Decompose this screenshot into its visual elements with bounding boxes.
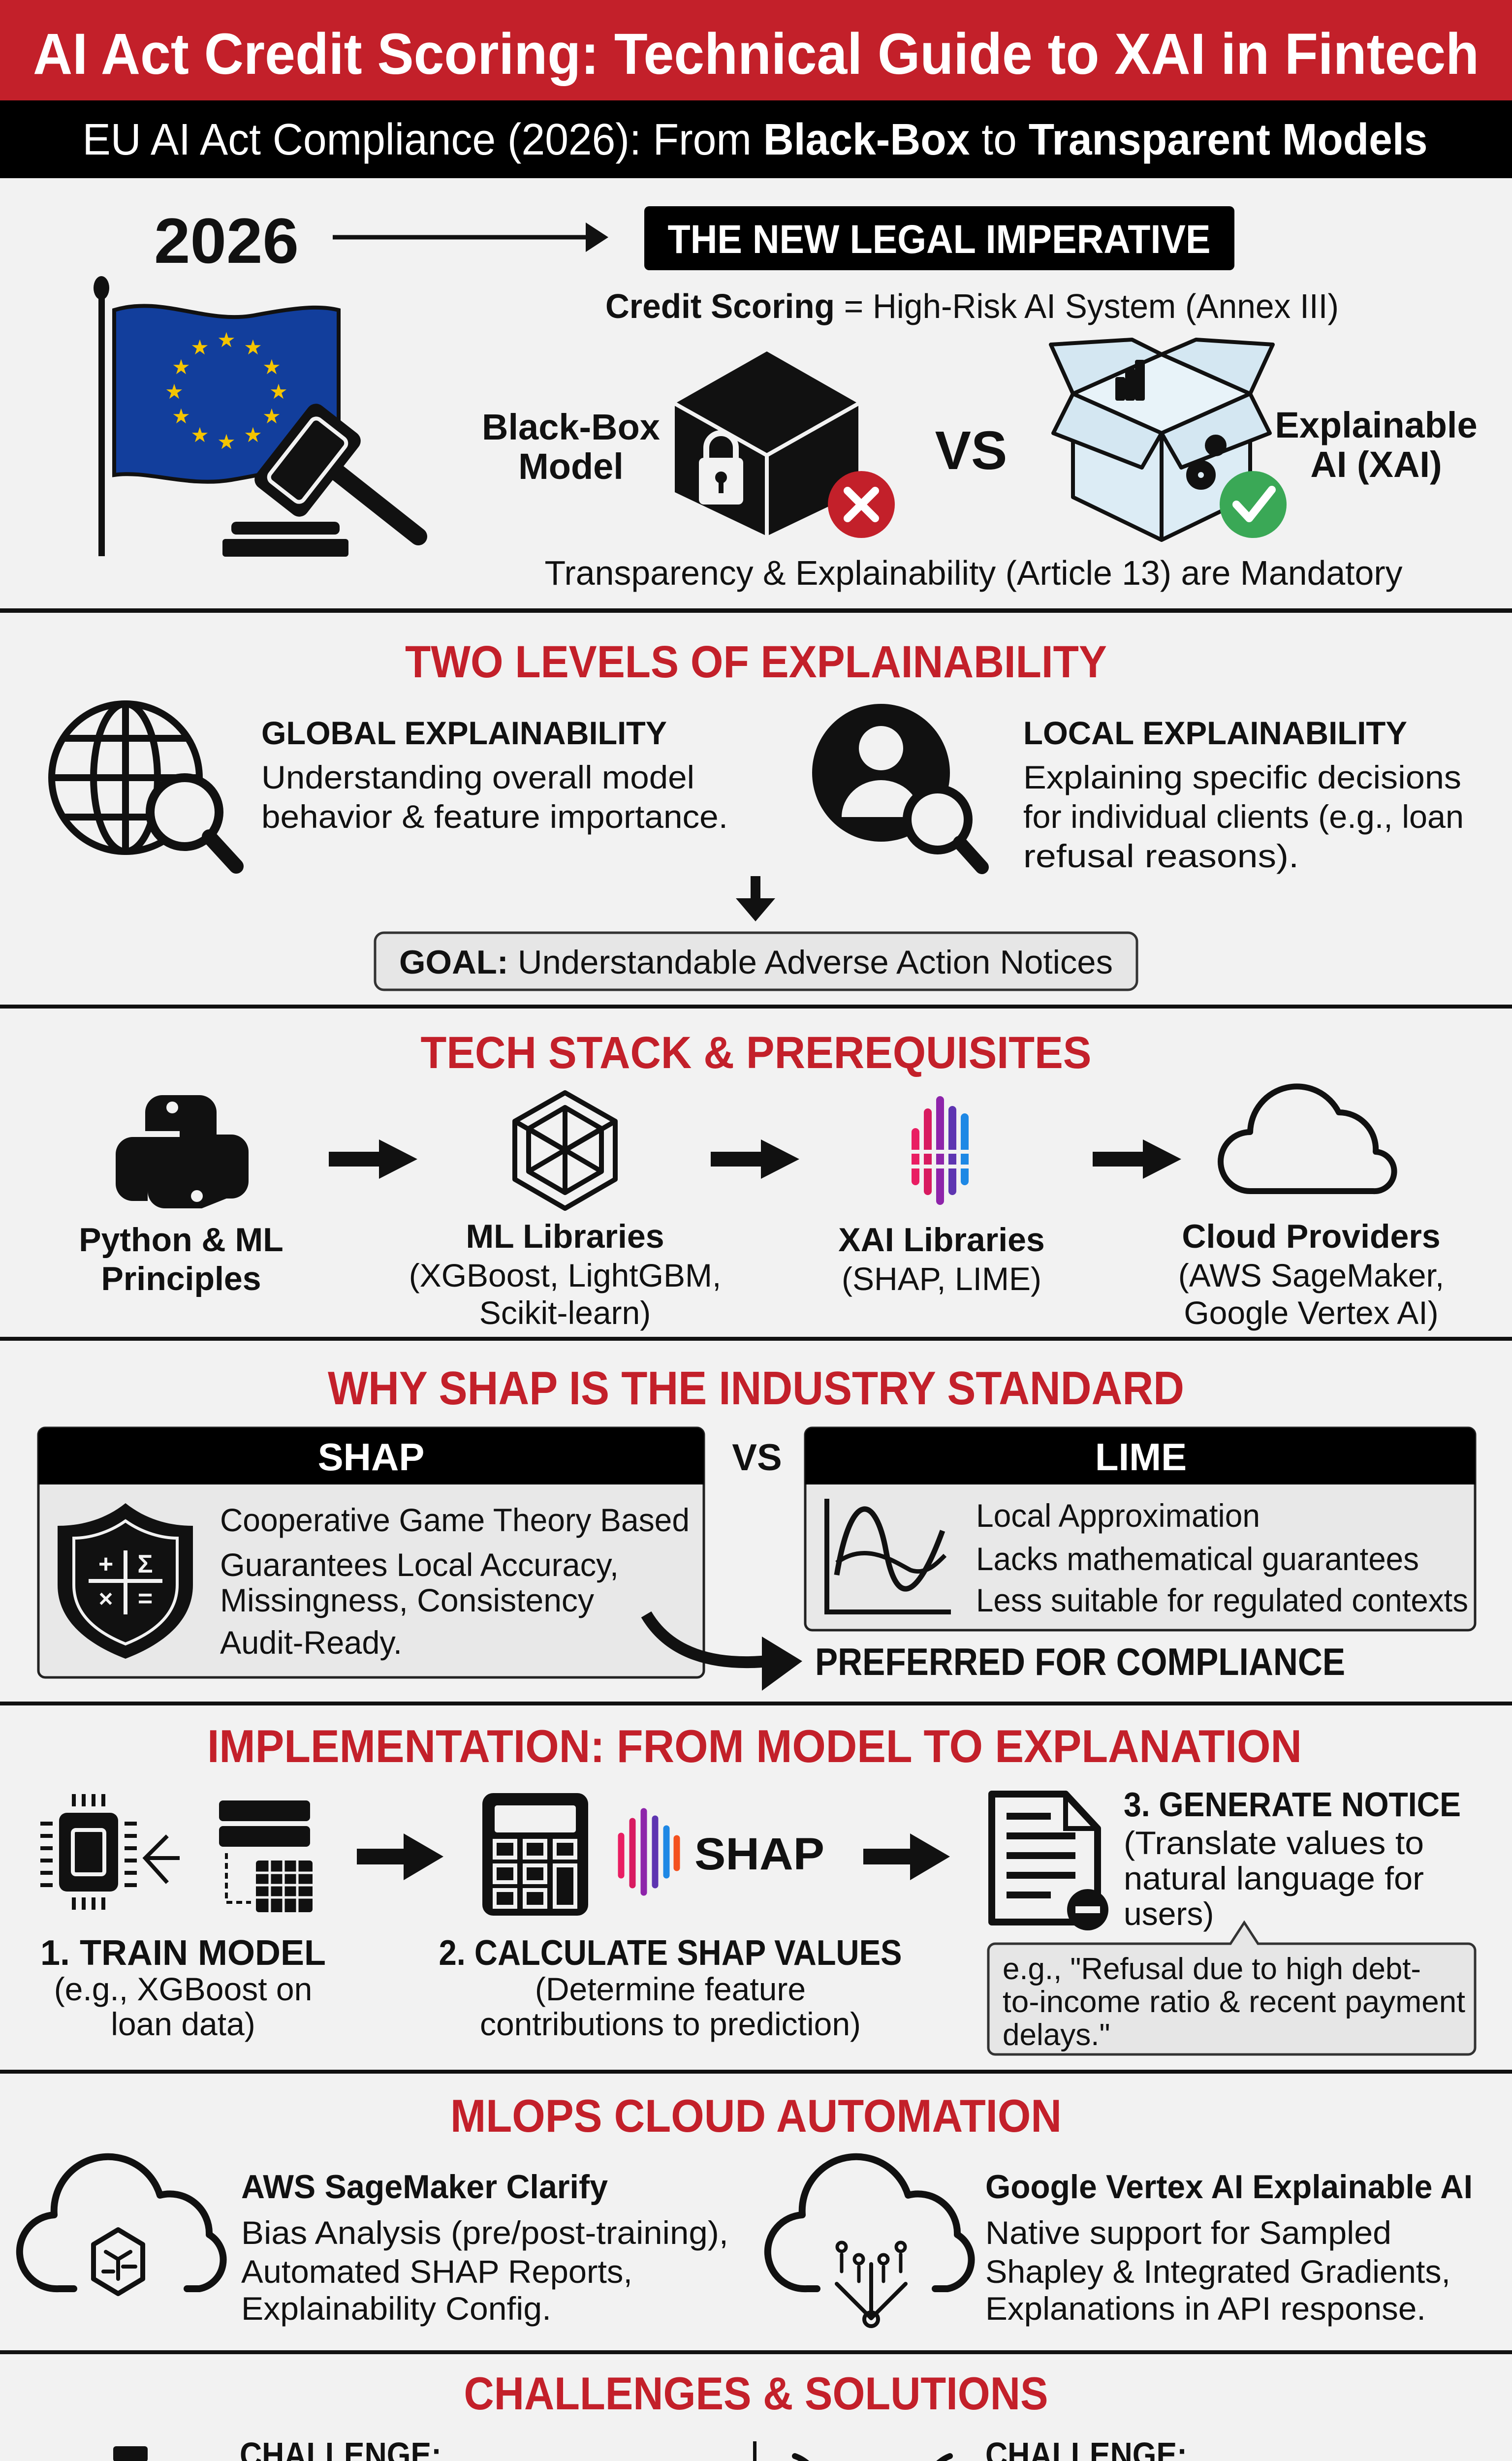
icon: EU flag: ★ — [172, 405, 190, 428]
label: XAI libraries: XAI Libraries — [838, 1221, 1045, 1259]
icon: cloud with network — [768, 2157, 972, 2326]
arrow — [711, 1139, 799, 1179]
callout: example notice: to-income ratio & recent payment — [1003, 1985, 1465, 2019]
subtitle — [0, 100, 1512, 178]
arrow — [329, 1139, 417, 1179]
panel: implementation — [40, 1720, 1475, 2054]
text: step 3: (Translate values to — [1124, 1825, 1424, 1861]
label: python: Python & ML — [79, 1221, 284, 1259]
icon: shield with math: + — [98, 1550, 113, 1578]
label: step 2: contributions to prediction) — [480, 2006, 861, 2042]
label: XAI libraries: (SHAP, LIME) — [842, 1261, 1041, 1297]
icon: ML libraries — [515, 1093, 615, 1208]
text: local explainability: for individual clients (e.g., loan — [1023, 798, 1464, 835]
panel: why SHAP — [38, 1362, 1475, 1691]
icon: green check — [1220, 471, 1287, 538]
icon: shield with math: = — [138, 1584, 153, 1613]
icon: red x — [828, 471, 895, 538]
icon: globe with magnifier — [52, 704, 236, 866]
text: AWS SageMaker Clarify: AWS SageMaker Clarify — [241, 2168, 608, 2206]
icon: calculator — [482, 1793, 588, 1916]
icon: person with magnifier — [812, 704, 982, 867]
text: Google Vertex AI: Google Vertex AI Explainable AI — [985, 2168, 1473, 2206]
label: explainable AI: AI (XAI) — [1310, 444, 1442, 485]
label: explainable AI — [1275, 405, 1478, 485]
heading: TECH STACK & PREREQUISITES — [420, 1028, 1092, 1078]
label: ML libraries: ML Libraries — [466, 1218, 664, 1255]
text: local explainability — [1023, 715, 1464, 874]
label: python: Principles — [101, 1260, 261, 1297]
label: ML libraries: Scikit-learn) — [479, 1294, 651, 1331]
callout: example notice: delays." — [1003, 2018, 1110, 2052]
icon: EU flag: ★ — [165, 380, 184, 403]
label: ML libraries — [409, 1218, 721, 1331]
panel: two levels of explainability — [52, 637, 1464, 990]
arrow — [357, 1833, 443, 1880]
goal box: GOAL: Understandable Adverse Action Notices — [399, 944, 1113, 981]
icon: EU flag: ★ — [190, 423, 209, 446]
heading: IMPLEMENTATION: FROM MODEL TO EXPLANATION — [207, 1720, 1302, 1772]
icon: cloud — [1221, 1086, 1394, 1191]
text: Google Vertex AI — [985, 2168, 1473, 2327]
panel: legal imperative — [94, 205, 1478, 592]
label: black-box model: Model — [518, 446, 624, 487]
panel: tech stack — [79, 1028, 1444, 1331]
title — [0, 0, 1512, 100]
label: cloud providers: (AWS SageMaker, — [1178, 1257, 1444, 1294]
icon: EU flag: ★ — [190, 336, 209, 359]
icon: cloud with brain — [20, 2157, 223, 2294]
label: step 1: (e.g., XGBoost on — [54, 1971, 312, 2007]
icon: tangled knot — [788, 2456, 960, 2461]
card: SHAP: Audit-Ready. — [220, 1624, 402, 1661]
text: AWS SageMaker Clarify — [241, 2168, 728, 2327]
card: LIME: Local Approximation — [976, 1497, 1260, 1534]
text: local explainability: LOCAL EXPLAINABILITY — [1023, 715, 1407, 751]
subtitle: EU AI Act Compliance (2026): From Black-Box to Transparent Models — [83, 115, 1427, 164]
vs label: VS — [935, 420, 1007, 481]
panel: MLOps cloud automation — [20, 2090, 1473, 2327]
icon: SHAP logo: SHAP — [694, 1829, 824, 1879]
icon: document notice — [992, 1794, 1108, 1930]
label: cloud providers — [1178, 1218, 1444, 1331]
arrow — [863, 1833, 950, 1880]
vs label: VS — [732, 1437, 782, 1479]
icon: EU flag: ★ — [262, 405, 281, 428]
icon: EU flag: ★ — [172, 355, 190, 379]
year 2026: 2026 — [154, 205, 299, 277]
text: Google Vertex AI: Shapley & Integrated Gradients, — [985, 2253, 1450, 2290]
text: local explainability: Explaining specific decisions — [1023, 759, 1461, 795]
card: SHAP: Guarantees Local Accuracy, — [220, 1546, 619, 1583]
callout: preferred for compliance: PREFERRED FOR COMPLIANCE — [815, 1640, 1345, 1683]
heading: WHY SHAP IS THE INDUSTRY STANDARD — [328, 1362, 1184, 1415]
label: explainable AI: Explainable — [1275, 405, 1478, 445]
label: cloud providers: Cloud Providers — [1182, 1218, 1441, 1255]
transparency statement: Transparency & Explainability (Article 13) are Mandatory — [544, 554, 1403, 592]
label: ML libraries: (XGBoost, LightGBM, — [409, 1257, 721, 1294]
icon: EU flag: ★ — [244, 423, 262, 446]
card: LIME: Less suitable for regulated contexts — [976, 1582, 1468, 1618]
label: cloud providers: Google Vertex AI) — [1184, 1294, 1439, 1331]
goal box — [375, 933, 1137, 990]
icon: open transparent box — [1051, 340, 1273, 540]
icon: EU flag — [94, 276, 339, 556]
card: SHAP — [38, 1428, 704, 1677]
label: XAI libraries — [838, 1221, 1045, 1297]
text: global explainability — [261, 715, 728, 835]
icon: gavel — [222, 400, 418, 557]
icon: EU flag: ★ — [269, 380, 288, 403]
icon: shield with math: Σ — [137, 1550, 153, 1578]
text: Google Vertex AI: Explanations in API response. — [985, 2290, 1426, 2327]
panel: challenges and solutions — [57, 2367, 1455, 2461]
icon: black cube with lock — [675, 351, 858, 536]
label: step 2 — [439, 1933, 902, 2042]
icon: shield with math — [58, 1503, 193, 1659]
icon: approximation chart — [827, 1499, 951, 1612]
card: LIME: Lacks mathematical guarantees — [976, 1541, 1419, 1577]
icon: EU flag: ★ — [217, 328, 236, 351]
text: step 3: 3. GENERATE NOTICE — [1124, 1785, 1461, 1824]
card: LIME — [805, 1428, 1475, 1630]
icon: EU flag: ★ — [244, 336, 262, 359]
text: step 3: users) — [1124, 1895, 1214, 1932]
label: step 1 — [40, 1933, 326, 2042]
arrow: curved to compliance — [646, 1614, 802, 1691]
imperative badge: THE NEW LEGAL IMPERATIVE — [667, 217, 1211, 262]
credit scoring statement: Credit Scoring = High-Risk AI System (Annex III) — [605, 287, 1339, 325]
text: step 3: natural language for — [1124, 1860, 1424, 1896]
text: global explainability: Understanding overall model — [261, 759, 694, 795]
icon: EU flag: ★ — [217, 430, 236, 453]
text: global explainability: GLOBAL EXPLAINABILITY — [261, 715, 667, 751]
card: SHAP: SHAP — [318, 1435, 424, 1479]
label: black-box model: Black-Box — [482, 407, 660, 447]
text: Google Vertex AI: Native support for Sampled — [985, 2214, 1391, 2251]
label: step 2: 2. CALCULATE SHAP VALUES — [439, 1933, 902, 1973]
text: step 3 — [1124, 1785, 1461, 1932]
label: step 1: loan data) — [111, 2006, 255, 2042]
label: black-box model — [482, 407, 660, 487]
arrow: down to goal — [736, 876, 775, 921]
icon: shield with math: × — [98, 1585, 113, 1612]
card: LIME: LIME — [1095, 1435, 1187, 1479]
heading: TWO LEVELS OF EXPLAINABILITY — [405, 637, 1107, 687]
heading: MLOPS CLOUD AUTOMATION — [450, 2090, 1062, 2142]
callout: example notice — [988, 1923, 1475, 2054]
icon: stopwatch — [57, 2446, 204, 2461]
heading: CHALLENGES & SOLUTIONS — [464, 2367, 1048, 2419]
text: global explainability: behavior & feature importance. — [261, 798, 728, 835]
arrow — [1093, 1139, 1181, 1179]
arrow: year to imperative — [333, 222, 608, 252]
icon: python — [116, 1095, 249, 1208]
label: python — [79, 1221, 284, 1297]
card: SHAP: Missingness, Consistency — [220, 1582, 594, 1618]
imperative badge — [644, 206, 1234, 270]
text: AWS SageMaker Clarify: Automated SHAP Reports, — [241, 2253, 632, 2290]
callout: example notice: e.g., "Refusal due to high debt- — [1003, 1952, 1421, 1986]
card: SHAP: Cooperative Game Theory Based — [220, 1502, 690, 1538]
icon: EU flag: ★ — [262, 355, 281, 379]
icon: chip and data — [40, 1794, 313, 1912]
text: local explainability: refusal reasons). — [1023, 838, 1299, 874]
label: step 2: (Determine feature — [535, 1971, 806, 2007]
text: AWS SageMaker Clarify: Bias Analysis (pre/post-training), — [241, 2214, 728, 2251]
label: step 1: 1. TRAIN MODEL — [40, 1933, 326, 1973]
icon: XAI libraries logo — [910, 1100, 972, 1201]
text: AWS SageMaker Clarify: Explainability Config. — [241, 2290, 551, 2327]
